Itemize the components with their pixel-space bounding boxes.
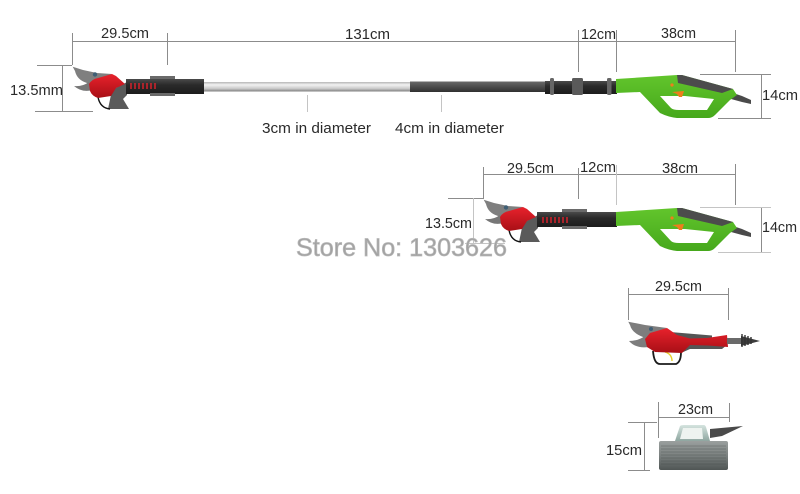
handle: green grip, grey top, orange trigger, cord [616,75,751,118]
label: head length second: 29.5cm [507,161,554,177]
label: 4cm diameter: 4cm in diameter [395,121,504,137]
dimension lines: third tool [628,288,728,320]
box body [659,441,728,470]
cord [710,426,743,438]
charger box [659,425,743,470]
rear tube with collars [545,78,617,95]
label: 13.5cm second: 13.5cm [425,216,472,232]
handle window [680,428,703,439]
label: 23cm charger: 23cm [678,402,713,418]
handle [616,208,751,251]
label: 38cm top: 38cm [661,26,696,42]
dimension lines: top tool [35,30,771,118]
red body [645,328,728,353]
extension tube: silver section [204,82,411,92]
label: head length top: 29.5cm [101,26,149,42]
label: 29.5cm third: 29.5cm [655,279,702,295]
label: 12cm top: 12cm [581,27,616,43]
spiral cord [727,334,760,347]
blades [628,322,667,347]
label: 12cm second: 12cm [580,160,616,176]
watermark: store number: Store No: 1303626 [296,234,507,262]
trigger guard [653,351,681,364]
cutting head: blades, red body, grip [73,67,204,109]
grey and dark strips [670,332,727,353]
pruner with short handle [484,200,751,251]
dimension lines: second tool [448,164,771,252]
label: 14cm top: 14cm [762,88,798,104]
handheld red pruner [628,322,760,364]
pole pruner: full length with extension [73,67,751,118]
label: 13.5mm: 13.5mm [10,83,63,99]
label: 3cm diameter: 3cm in diameter [262,121,371,137]
label: 38cm second: 38cm [662,161,698,177]
extension tube: dark section [410,82,546,92]
label: 15cm charger: 15cm [606,443,642,459]
carrying handle [675,425,710,441]
dimension lines: charger [628,402,730,470]
pivot [649,327,653,331]
tube with collar and red stripes [537,210,617,228]
label: total length: 131cm [345,27,390,43]
yellow trigger [665,352,672,361]
label: 14cm second: 14cm [762,220,797,236]
cutting head [484,200,540,242]
